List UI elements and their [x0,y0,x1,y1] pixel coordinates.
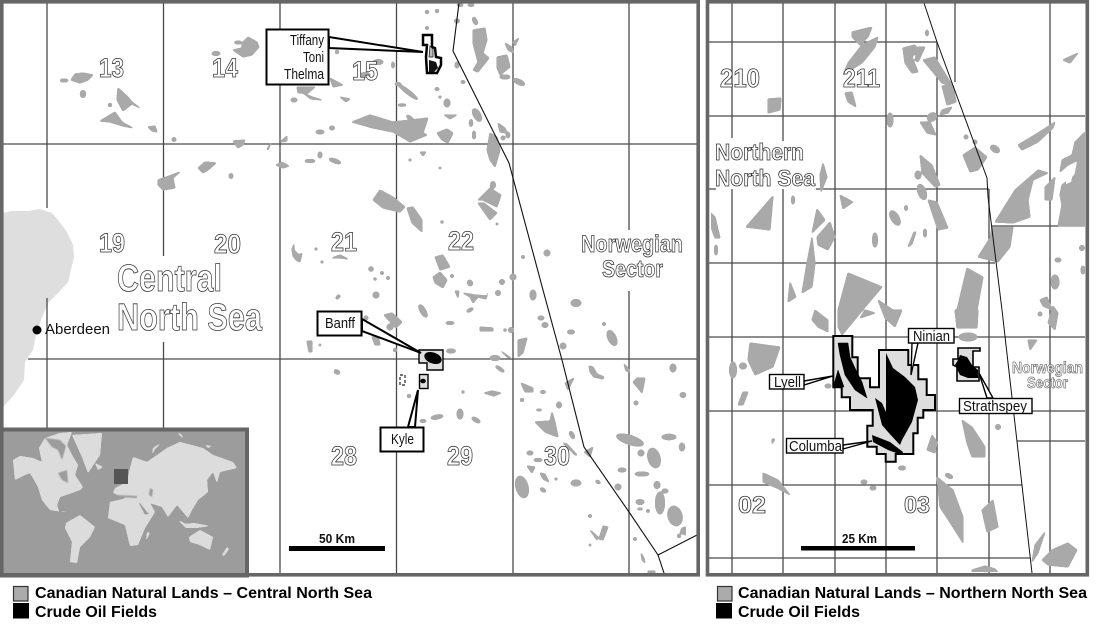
oil field: Ninian [875,353,918,445]
panel frame [2,2,698,575]
callout: Tiffany, Toni, Thelma: Tiffany [290,32,324,49]
panel: Central North Sea map [2,2,698,576]
heading: Central North Sea: North Sea [117,297,263,339]
block numbers: 02 [738,492,766,519]
licence blocks: Northern North Sea lands [711,27,1085,572]
panel frame [708,2,1087,575]
locator square [114,469,128,484]
heading: Norwegian Sector: Sector [1027,375,1068,392]
heading: Norwegian Sector [1012,360,1083,392]
heading: Northern North Sea: North Sea [715,165,815,191]
block numbers: 22 [448,226,474,256]
heading: Norwegian Sector: Norwegian [581,231,683,258]
panel: Northern North Sea map [708,2,1087,575]
callout: Strathspey [953,348,1032,415]
heading: Norwegian Sector [581,231,683,283]
heading: Norwegian Sector: Sector [602,256,663,283]
heading: Norwegian Sector: Norwegian [1012,360,1083,377]
callout: Banff [318,312,443,370]
callout: Tiffany, Toni, Thelma: Thelma [284,66,325,83]
block numbers: 29 [447,441,473,471]
licence blocks: Central North Sea lands [60,4,686,573]
callout: Kyle: Kyle [391,431,414,448]
Canadian Natural lands outline with oil fields [833,336,935,462]
block numbers: 210 [720,63,760,93]
legend: Northern North Sea [716,585,1087,621]
block numbers: 21 [331,227,357,257]
heading: Northern North Sea: Northern [715,139,804,165]
callout: Lyell: Lyell [774,374,801,391]
block numbers: 28 [331,441,357,471]
callout: Ninian: Ninian [913,328,950,345]
callout: Kyle [380,374,428,452]
Norwegian sector boundary [924,3,1032,573]
white hole in large block [1066,170,1074,184]
callout: Ninian [908,328,954,375]
block numbers: 03 [904,492,930,519]
block numbers: 14 [212,53,238,83]
block numbers [720,63,930,519]
scale bar: 25 Km [801,531,915,550]
oil field: Columba [872,435,903,455]
block numbers: 20 [214,229,241,259]
block numbers: 211 [843,63,880,93]
Norwegian sector boundary [453,3,697,573]
callout: Lyell [770,374,833,391]
callout: Banff: Banff [325,315,356,332]
heading: Central North Sea: Central [117,258,222,300]
callout: Strathspey: Strathspey [963,398,1027,415]
land: Scotland coast [3,209,74,407]
scale bar: 50 Km [289,531,385,551]
block numbers: 19 [99,228,125,258]
block numbers: 15 [352,56,378,86]
callout: Tiffany, Toni, Thelma: Toni [303,49,324,66]
heading: Central North Sea [117,258,263,339]
legend: Northern North Sea: Canadian Natural Lands – Northern North Sea [738,585,1087,602]
heading: Northern North Sea [715,139,815,191]
callout: Columba: Columba [789,438,843,455]
scale bar: 50 Km: 50 Km [319,531,355,546]
block numbers [99,53,570,471]
Aberdeen marker: Aberdeen [45,321,110,338]
inset: world map locator [2,430,247,576]
oil field: Lyell [833,343,867,398]
scale bar: 25 Km: 25 Km [842,531,877,546]
legend: Central North Sea [13,585,372,621]
block numbers: 13 [99,53,124,83]
block numbers: 30 [544,441,570,471]
legend: Central North Sea: Crude Oil Fields [35,604,157,621]
callout: Tiffany, Toni, Thelma [266,30,441,84]
legend: Northern North Sea: Crude Oil Fields [738,604,860,621]
legend: Central North Sea: Canadian Natural Lands – Central North Sea [35,585,372,602]
